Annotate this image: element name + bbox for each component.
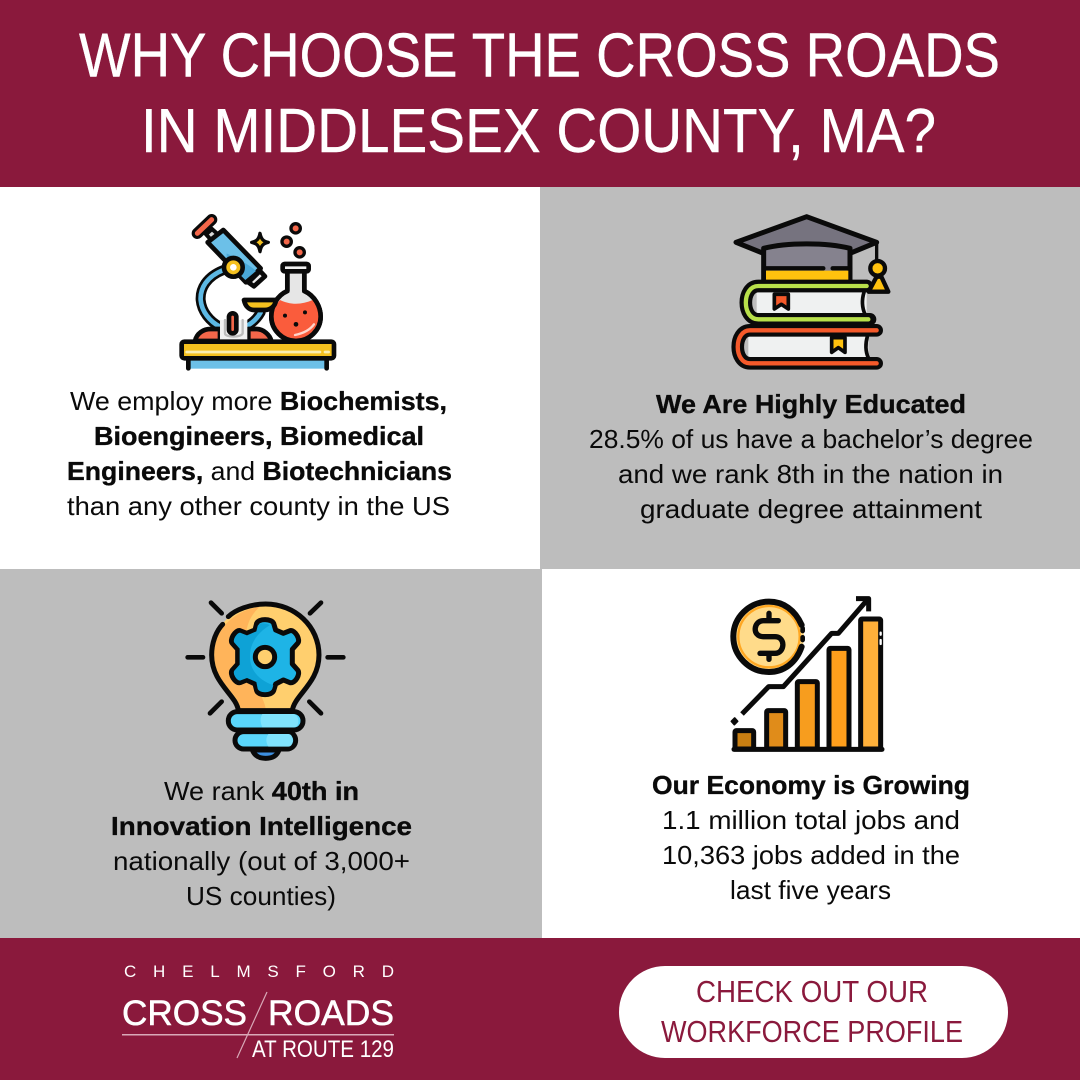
text block: economy: last five years [730,875,891,905]
header panel [0,0,1080,187]
footer panel [0,938,1080,1080]
logo: Chelmsford Cross Roads at Route 129: ROADS [268,994,394,1033]
text block: innovation: nationally (out of 3,000+ [113,846,410,876]
logo: Chelmsford Cross Roads at Route 129 [122,962,394,1063]
button: workforce profile [619,966,1008,1058]
icon: light bulb with gear [188,603,343,758]
text block: education [589,389,1033,524]
text block: innovation: Innovation Intelligence [111,811,412,841]
text block: biotech employment [67,386,452,521]
text block: economy [652,770,970,905]
icon: graduation cap on books [736,217,888,363]
logo: Chelmsford Cross Roads at Route 129: AT ROUTE 129 [252,1036,394,1063]
panel: economy [542,569,1080,938]
text block: biotech employment: Bioengineers, Biomedical [94,421,424,451]
text block: economy: Our Economy is Growing [652,770,970,800]
text block: economy: 1.1 million total jobs and [662,805,960,835]
panel: education [540,187,1080,569]
icon: microscope and flask [182,220,334,369]
button: workforce profile: WORKFORCE PROFILE [661,1014,963,1049]
text block: education: graduate degree attainment [640,494,983,524]
text block: innovation: We rank 40th in [164,776,359,806]
icon: coin and growth chart [731,599,882,749]
logo: Chelmsford Cross Roads at Route 129: CROSS [122,994,247,1033]
text block: biotech employment: We employ more Biochemists, [70,386,447,416]
title [79,22,1000,166]
panel: biotech employment [0,187,540,569]
text block: education: 28.5% of us have a bachelor’s degree [589,424,1033,454]
logo: Chelmsford Cross Roads at Route 129: CHELMSFORD [124,962,394,981]
text block: education: We Are Highly Educated [656,389,966,419]
text block: biotech employment: Engineers, and Biotechnicians [67,456,452,486]
text block: innovation: US counties) [186,881,336,911]
text block: education: and we rank 8th in the nation in [618,459,1003,489]
button: workforce profile: CHECK OUT OUR [696,974,928,1009]
title: IN MIDDLESEX COUNTY, MA? [141,97,936,166]
text block: biotech employment: than any other county in the US [67,491,450,521]
panel: innovation [0,569,542,938]
text block: economy: 10,363 jobs added in the [662,840,960,870]
text block: innovation [111,776,412,911]
